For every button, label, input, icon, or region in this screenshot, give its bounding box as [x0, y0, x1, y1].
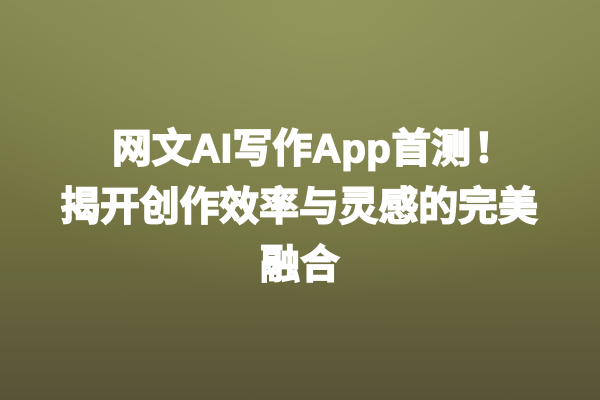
title line 2: 揭开创作效率与灵感的完美 — [60, 185, 538, 229]
title — [60, 126, 539, 287]
title line 1: 网文AI写作App首测！ — [112, 127, 514, 171]
title line 3: 融合 — [260, 243, 340, 287]
